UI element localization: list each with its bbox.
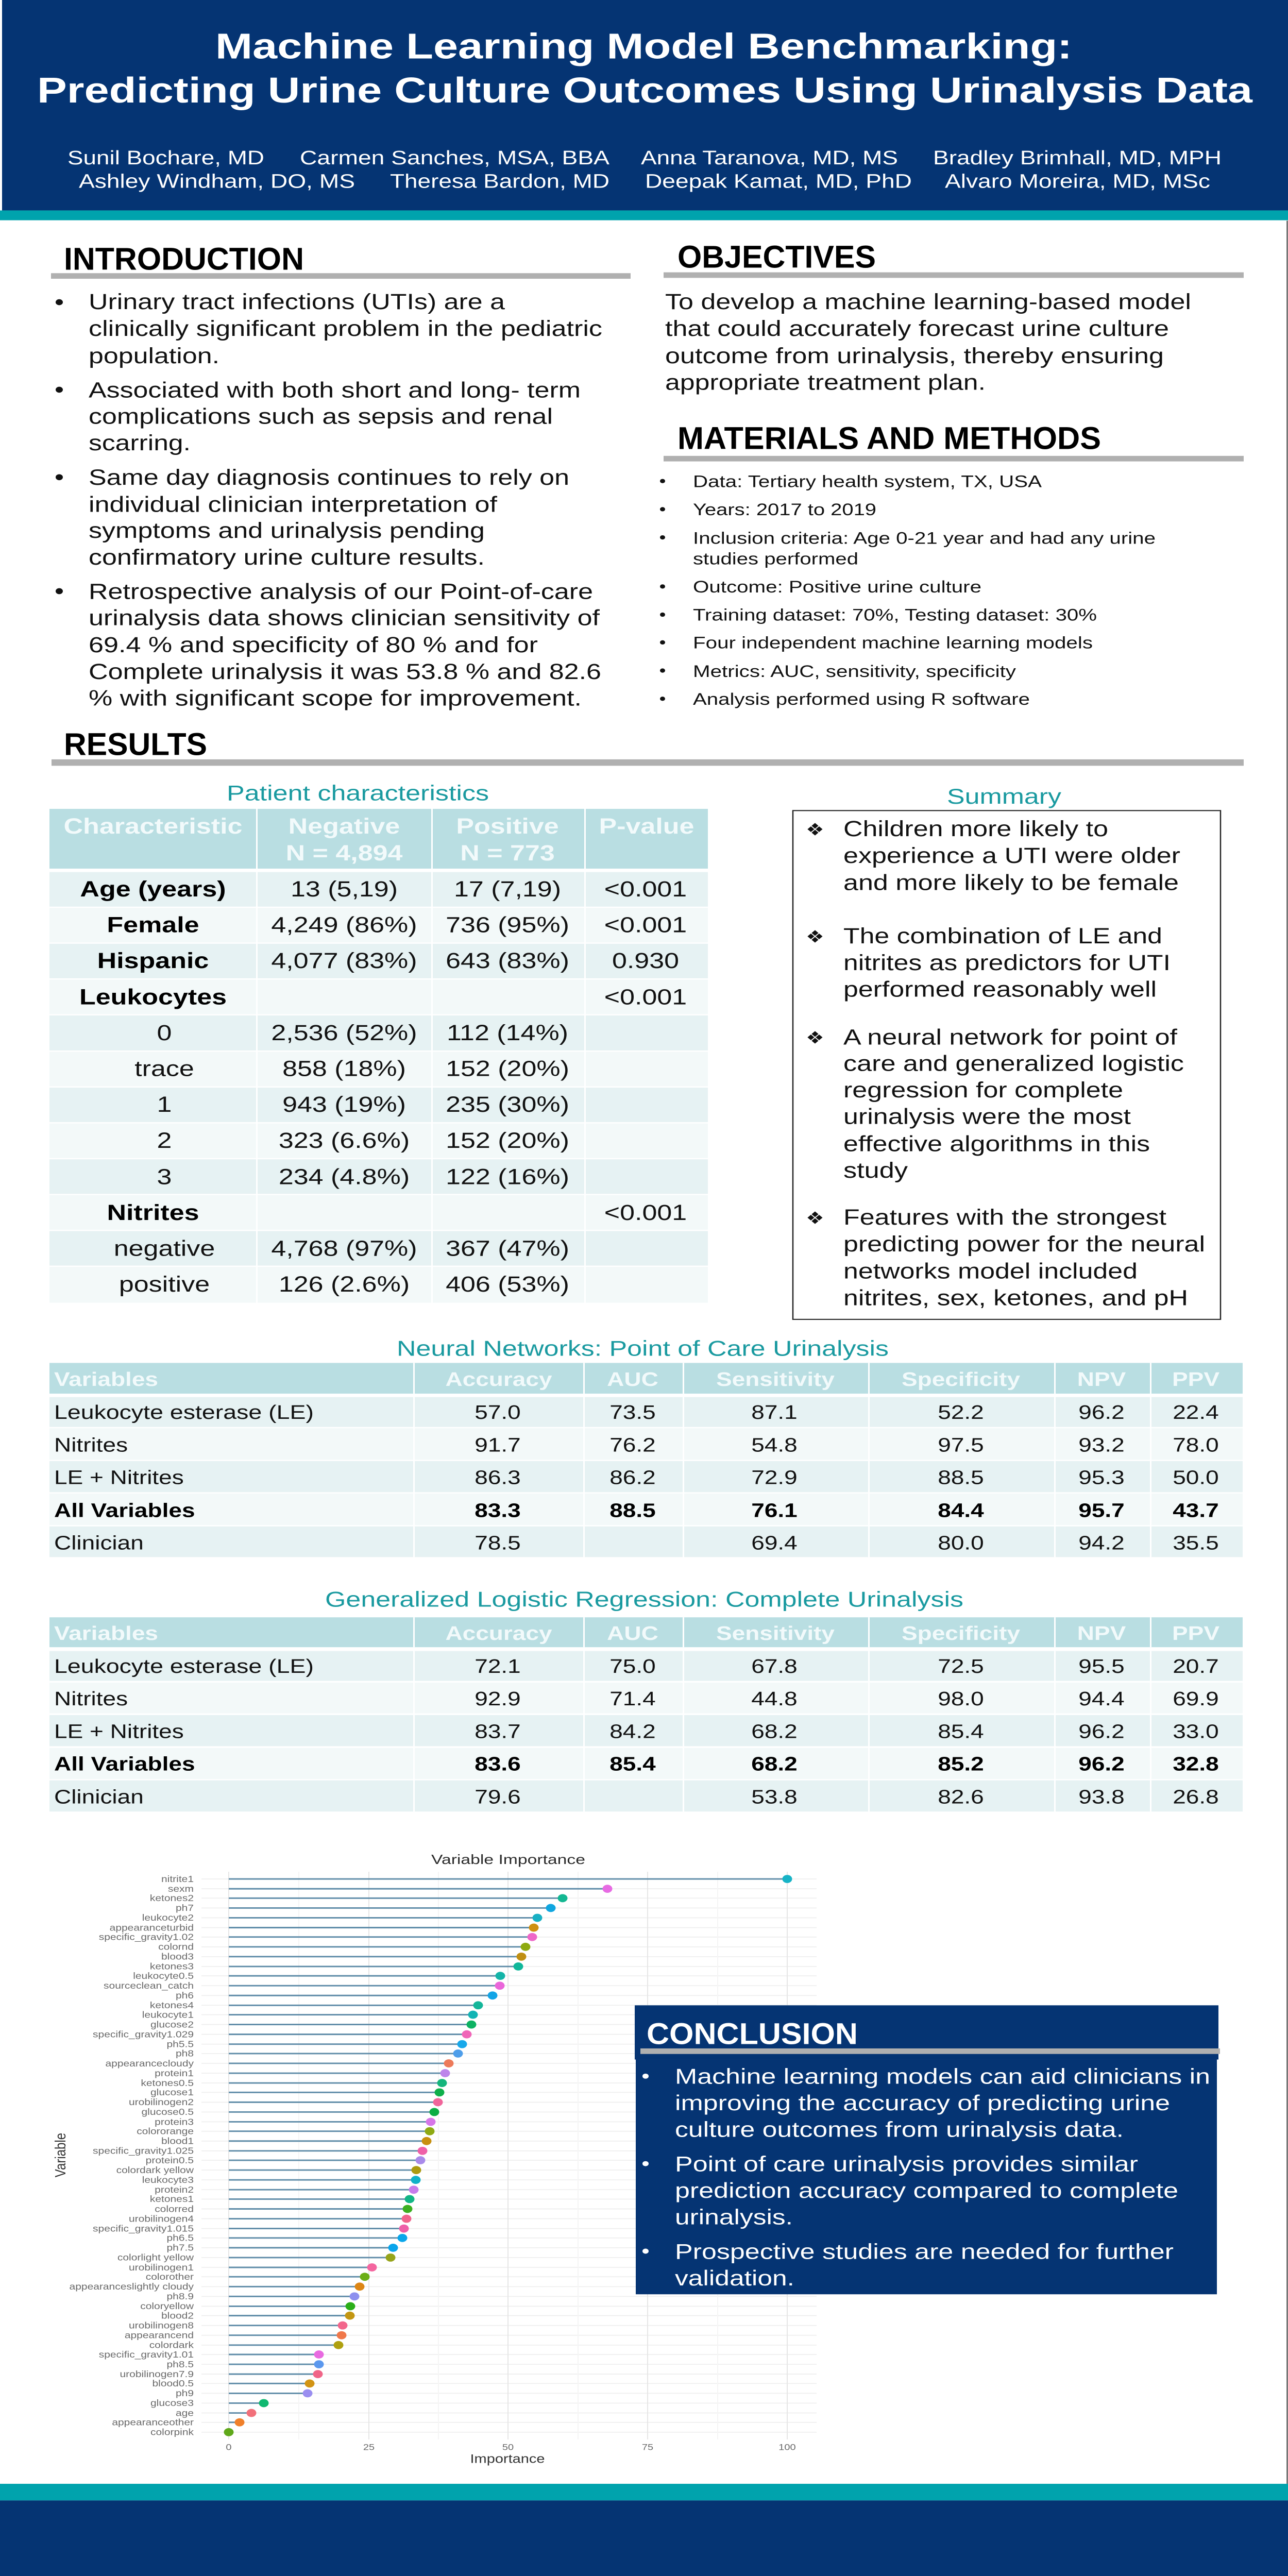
y axis variable labels: ketones2 xyxy=(150,1894,194,1904)
table body: 35.5 xyxy=(1173,1532,1219,1554)
table body: 93.2 xyxy=(1078,1434,1125,1456)
y axis variable labels: specific_gravity1.025 xyxy=(93,2146,194,2156)
table body: 86.3 xyxy=(474,1466,521,1488)
text block: introduction bullets: scarring. xyxy=(89,431,191,455)
table body: 234 (4.8%) xyxy=(279,1164,410,1189)
y axis variable labels: ph6.5 xyxy=(166,2233,194,2243)
y axis variable labels: specific_gravity1.01 xyxy=(99,2350,194,2360)
y axis variable labels: glucose0.5 xyxy=(142,2108,194,2117)
table body: 68.2 xyxy=(751,1753,798,1775)
y axis variable labels: colorred xyxy=(155,2205,194,2214)
table body: 73.5 xyxy=(609,1401,656,1423)
table body: 126 (2.6%) xyxy=(279,1272,410,1297)
text block: conclusion bullets: Machine learning models can aid clinicians in xyxy=(675,2064,1210,2089)
y axis variable labels: specific_gravity1.029 xyxy=(93,2030,194,2040)
table header row: Specificity xyxy=(902,1368,1021,1390)
text block: methods list: Outcome: Positive urine culture xyxy=(693,578,981,596)
text block: summary bullets: care and generalized logistic xyxy=(843,1052,1184,1076)
text block: introduction bullets: 69.4 % and specificity of 80 % and for xyxy=(89,633,538,657)
table body: 93.8 xyxy=(1078,1786,1125,1808)
table body: 736 (95%) xyxy=(446,913,569,937)
table body: 26.8 xyxy=(1173,1786,1219,1808)
table body: 80.0 xyxy=(938,1532,984,1554)
text block: methods list xyxy=(660,472,1156,708)
table body: 2 xyxy=(157,1128,172,1153)
table body: Leukocyte esterase (LE) xyxy=(54,1655,314,1677)
text block: methods list: studies performed xyxy=(693,549,858,568)
table body: 323 (6.6%) xyxy=(279,1128,410,1153)
text block: summary bullets: predicting power for the neural xyxy=(843,1232,1205,1256)
table body: 94.2 xyxy=(1078,1532,1125,1554)
y axis variable labels: appearancend xyxy=(125,2331,194,2341)
text block: introduction bullets: confirmatory urine culture results. xyxy=(89,545,485,569)
table body: 20.7 xyxy=(1173,1655,1219,1677)
table header row: P-value xyxy=(599,814,694,839)
text block: summary bullets: nitrites as predictors for UTI xyxy=(843,951,1171,975)
panel: materials and methods xyxy=(660,421,1244,708)
authors: Bradley Brimhall, MD, MPH xyxy=(933,147,1222,168)
panel: introduction xyxy=(51,242,631,710)
y axis variable labels: protein1 xyxy=(155,2069,194,2078)
text block: conclusion bullets: urinalysis. xyxy=(675,2205,793,2229)
table body: 32.8 xyxy=(1173,1753,1219,1775)
text block: objectives: that could accurately forecast urine culture xyxy=(665,316,1169,341)
text block: introduction bullets: clinically significant problem in the pediatric xyxy=(89,316,602,341)
authors: Sunil Bochare, MD xyxy=(67,147,264,168)
y axis variable labels: ketones4 xyxy=(150,2001,194,2011)
x axis tick labels: 25 xyxy=(363,2442,375,2452)
y axis variable labels: leukocyte1 xyxy=(142,2010,194,2020)
table body: 43.7 xyxy=(1173,1499,1219,1521)
y axis variable labels: protein3 xyxy=(155,2117,194,2127)
table body: 53.8 xyxy=(751,1786,798,1808)
table body: Nitrites xyxy=(54,1688,128,1709)
heading: conclusion xyxy=(640,2017,1220,2054)
table body: 85.4 xyxy=(609,1753,656,1775)
text block: introduction bullets: % with significant scope for improvement. xyxy=(89,686,582,710)
y axis variable labels: urobilinogen7.9 xyxy=(120,2369,194,2379)
table body: 33.0 xyxy=(1173,1720,1219,1742)
y axis variable labels: urobilinogen4 xyxy=(129,2214,194,2224)
chart: variable importance lollipop xyxy=(52,1853,817,2466)
y axis variable labels: ph9 xyxy=(176,2389,194,2399)
heading: summary: Summary xyxy=(947,784,1061,808)
table body: 4,768 (97%) xyxy=(271,1236,417,1261)
y axis variable labels: colordark xyxy=(149,2341,194,2350)
table body: 67.8 xyxy=(751,1655,798,1677)
y axis variable labels: nitrite1 xyxy=(161,1874,194,1884)
x axis tick labels: 75 xyxy=(642,2442,653,2452)
authors: Alvaro Moreira, MD, MSc xyxy=(945,170,1210,192)
heading: neural networks: Neural Networks: Point of Care Urinalysis xyxy=(397,1336,889,1360)
text block: summary bullets xyxy=(806,817,1205,1310)
table body: <0.001 xyxy=(604,913,687,937)
text block: introduction bullets: complications such as sepsis and renal xyxy=(89,404,553,429)
y axis variable labels: colororange xyxy=(137,2127,194,2137)
text block: objectives: appropriate treatment plan. xyxy=(665,370,986,394)
text block: summary bullets: ❖ xyxy=(806,1028,824,1048)
y axis variable labels: ph8.5 xyxy=(166,2360,194,2369)
table body: 78.5 xyxy=(474,1532,521,1554)
table body: trace xyxy=(134,1057,194,1081)
text block: methods list: Metrics: AUC, sensitivity, specificity xyxy=(693,662,1016,681)
table body: 79.6 xyxy=(474,1786,521,1808)
table body: 2,536 (52%) xyxy=(271,1021,417,1045)
table header row: AUC xyxy=(607,1622,658,1644)
text block: conclusion bullets xyxy=(642,2064,1210,2290)
text block: summary bullets: Features with the strongest xyxy=(843,1205,1166,1229)
table body: negative xyxy=(114,1236,215,1261)
y axis variable labels: urobilinogen2 xyxy=(129,2098,194,2108)
table body: Leukocytes xyxy=(79,985,227,1009)
text block: summary bullets: A neural network for point of xyxy=(843,1025,1178,1049)
table body: positive xyxy=(119,1272,210,1297)
table body: 76.1 xyxy=(751,1499,798,1521)
heading: objectives xyxy=(664,239,1244,278)
table header row: Variables xyxy=(54,1368,158,1390)
table body: 858 (18%) xyxy=(282,1057,406,1081)
table body: 82.6 xyxy=(938,1786,984,1808)
table body: 4,077 (83%) xyxy=(271,948,417,973)
heading: results: RESULTS xyxy=(64,727,207,762)
text block: summary bullets: The combination of LE and xyxy=(843,924,1162,948)
y axis variable labels: blood2 xyxy=(161,2311,194,2321)
text block: summary bullets: performed reasonably well xyxy=(843,977,1157,1002)
table header row: Positive xyxy=(456,814,559,839)
y axis variable labels: appearancecloudy xyxy=(106,2059,194,2069)
text block: introduction bullets: Urinary tract infections (UTIs) are a xyxy=(89,290,505,314)
y axis variable labels: glucose2 xyxy=(150,2020,194,2030)
title xyxy=(37,26,1253,110)
header banner xyxy=(0,0,1288,221)
table body: 152 (20%) xyxy=(446,1057,569,1081)
y axis variable labels: specific_gravity1.015 xyxy=(93,2224,194,2234)
text block: methods list: Analysis performed using R software xyxy=(693,690,1030,708)
text block: introduction bullets: Retrospective analysis of our Point-of-care xyxy=(89,579,593,603)
text block: conclusion bullets: improving the accuracy of predicting urine xyxy=(675,2091,1170,2115)
y axis variable labels: colornd xyxy=(158,1942,194,1952)
table body: 643 (83%) xyxy=(446,948,569,973)
table body xyxy=(49,1651,1243,1811)
heading: conclusion: CONCLUSION xyxy=(647,2017,858,2050)
table header row: Sensitivity xyxy=(716,1368,835,1390)
table header row: PPV xyxy=(1172,1368,1219,1390)
table body: 72.9 xyxy=(751,1466,798,1488)
authors: Ashley Windham, DO, MS xyxy=(79,170,355,192)
table header row: Accuracy xyxy=(445,1368,552,1390)
text block: introduction bullets xyxy=(56,290,602,710)
table body: <0.001 xyxy=(604,1200,687,1225)
table body: 54.8 xyxy=(751,1434,798,1456)
y axis variable labels xyxy=(70,1874,194,2437)
y axis variable labels: blood3 xyxy=(161,1952,194,1962)
table body: All Variables xyxy=(54,1499,195,1521)
text block: methods list: Data: Tertiary health system, TX, USA xyxy=(693,472,1042,491)
table body: 87.1 xyxy=(751,1401,798,1423)
y axis variable labels: sexm xyxy=(168,1884,194,1894)
table body: 85.4 xyxy=(938,1720,984,1742)
y axis variable labels: colorlight yellow xyxy=(117,2253,194,2263)
table body: 95.7 xyxy=(1078,1499,1125,1521)
table body: LE + Nitrites xyxy=(54,1720,184,1742)
text block: summary bullets: ❖ xyxy=(806,820,824,839)
table header row: Variables xyxy=(54,1622,158,1644)
text block: methods list: Inclusion criteria: Age 0-21 year and had any urine xyxy=(693,529,1156,548)
y axis variable labels: protein2 xyxy=(155,2185,194,2195)
x axis tick labels: 100 xyxy=(778,2442,796,2452)
text block: conclusion bullets: Point of care urinalysis provides similar xyxy=(675,2152,1138,2176)
table body: Leukocyte esterase (LE) xyxy=(54,1401,314,1423)
table body: 0 xyxy=(157,1021,172,1045)
table header row xyxy=(49,1363,1243,1394)
heading: introduction xyxy=(51,242,631,279)
chart title: Variable Importance xyxy=(431,1853,585,1867)
lollipop stems and dots xyxy=(224,1875,792,2436)
table body: 96.2 xyxy=(1078,1753,1125,1775)
y axis variable labels: coloryellow xyxy=(140,2302,194,2312)
text block: introduction bullets: urinalysis data shows clinician sensitivity of xyxy=(89,606,600,630)
authors: Anna Taranova, MD, MS xyxy=(641,147,898,168)
table body: 84.2 xyxy=(609,1720,656,1742)
y axis variable labels: ketones0.5 xyxy=(141,2078,194,2088)
table body: 4,249 (86%) xyxy=(271,913,417,937)
y axis variable labels: ketones3 xyxy=(150,1962,194,1972)
table body: 95.3 xyxy=(1078,1466,1125,1488)
table body: All Variables xyxy=(54,1753,195,1775)
y axis variable labels: leukocyte0.5 xyxy=(133,1971,194,1981)
table body: 122 (16%) xyxy=(446,1164,569,1189)
y axis variable labels: urobilinogen8 xyxy=(129,2321,194,2331)
table body: 96.2 xyxy=(1078,1401,1125,1423)
y axis variable labels: blood1 xyxy=(161,2137,194,2146)
text block: summary bullets: networks model included xyxy=(843,1259,1138,1283)
table body: <0.001 xyxy=(604,877,687,902)
table body: 83.3 xyxy=(474,1499,521,1521)
heading: introduction: INTRODUCTION xyxy=(64,242,304,277)
table header row: Negative xyxy=(289,814,400,839)
text block: introduction bullets: symptoms and urinalysis pending xyxy=(89,518,485,543)
heading: generalized logistic regression: Generalized Logistic Regression: Complete Urinalysis xyxy=(325,1587,963,1611)
y axis variable labels: colorother xyxy=(146,2273,194,2282)
y axis variable labels: leukocyte3 xyxy=(142,2176,194,2185)
heading: materials and methods: MATERIALS AND METHODS xyxy=(677,421,1101,456)
table body: 367 (47%) xyxy=(446,1236,569,1261)
table header row: NPV xyxy=(1077,1368,1126,1390)
y axis variable labels: glucose3 xyxy=(150,2399,194,2409)
text block: conclusion bullets: culture outcomes from urinalysis data. xyxy=(675,2117,1124,2141)
table body: Age (years) xyxy=(80,877,226,902)
table body: Nitrites xyxy=(54,1434,128,1456)
table body: 94.4 xyxy=(1078,1688,1125,1709)
authors: Theresa Bardon, MD xyxy=(390,170,609,192)
y axis variable labels: ph7.5 xyxy=(166,2243,194,2253)
table body: 17 (7,19) xyxy=(454,877,561,902)
table body: 83.7 xyxy=(474,1720,521,1742)
title: Predicting Urine Culture Outcomes Using Urinalysis Data xyxy=(37,71,1253,110)
summary box xyxy=(793,810,1221,1319)
text block: objectives xyxy=(665,290,1191,394)
y axis variable labels: ph8.9 xyxy=(166,2292,194,2302)
text block: summary bullets: urinalysis were the most xyxy=(843,1105,1131,1128)
table header row: PPV xyxy=(1172,1622,1219,1644)
table body: 97.5 xyxy=(938,1434,984,1456)
text block: summary bullets: regression for complete xyxy=(843,1078,1123,1102)
text block: objectives: outcome from urinalysis, thereby ensuring xyxy=(665,344,1164,368)
table body: 406 (53%) xyxy=(446,1272,569,1297)
text block: introduction bullets: Associated with both short and long- term xyxy=(89,378,581,402)
table body: 235 (30%) xyxy=(446,1092,569,1117)
table body: <0.001 xyxy=(604,985,687,1009)
authors xyxy=(67,147,1222,192)
panel: objectives xyxy=(664,239,1244,394)
text block: introduction bullets: individual clinician interpretation of xyxy=(89,492,498,516)
table body: 95.5 xyxy=(1078,1655,1125,1677)
table body: 943 (19%) xyxy=(282,1092,406,1117)
table body: 75.0 xyxy=(609,1655,656,1677)
table body: 84.4 xyxy=(938,1499,984,1521)
x axis tick labels: 50 xyxy=(502,2442,514,2452)
table body: 86.2 xyxy=(609,1466,656,1488)
table body: 13 (5,19) xyxy=(291,877,398,902)
table header row: N = 4,894 xyxy=(286,841,403,866)
table body: 96.2 xyxy=(1078,1720,1125,1742)
table header row: Characteristic xyxy=(64,814,243,839)
text block: summary bullets: ❖ xyxy=(806,1208,824,1228)
y axis variable labels: ketones1 xyxy=(150,2195,194,2205)
panel: generalized logistic regression table xyxy=(49,1587,1243,1811)
x axis tick labels xyxy=(226,2442,796,2452)
table body: 44.8 xyxy=(751,1688,798,1709)
table body: 88.5 xyxy=(609,1499,656,1521)
y axis variable labels: ph5.5 xyxy=(166,2040,194,2049)
y axis variable labels: urobilinogen1 xyxy=(129,2263,194,2273)
y axis variable labels: ph6 xyxy=(176,1991,194,2001)
heading: results xyxy=(52,727,1244,766)
panel: conclusion xyxy=(635,2005,1220,2294)
y axis variable labels: sourceclean_catch xyxy=(104,1981,194,1991)
table header row: NPV xyxy=(1077,1622,1126,1644)
table body: 1 xyxy=(157,1092,172,1117)
y axis variable labels: leukocyte2 xyxy=(142,1913,194,1923)
text block: summary bullets: ❖ xyxy=(806,927,824,946)
heading: patient characteristics: Patient characteristics xyxy=(227,781,489,805)
table body: 76.2 xyxy=(609,1434,656,1456)
text block: introduction bullets: Same day diagnosis continues to rely on xyxy=(89,465,569,489)
table header row: Accuracy xyxy=(445,1622,552,1644)
table body: 112 (14%) xyxy=(447,1021,568,1045)
text block: conclusion bullets: Prospective studies are needed for further xyxy=(675,2240,1174,2263)
axis title: importance: Importance xyxy=(470,2452,545,2466)
table body: 72.1 xyxy=(474,1655,521,1677)
text block: methods list: Years: 2017 to 2019 xyxy=(693,500,876,519)
table body: Female xyxy=(107,913,199,937)
text block: summary bullets: Children more likely to xyxy=(843,817,1108,841)
panel: summary xyxy=(793,784,1221,1319)
y axis variable labels: appearanceother xyxy=(112,2418,194,2428)
text block: summary bullets: nitrites, sex, ketones, and pH xyxy=(843,1286,1188,1310)
table body: 68.2 xyxy=(751,1720,798,1742)
text block: summary bullets: and more likely to be female xyxy=(843,871,1179,894)
table body: 22.4 xyxy=(1173,1401,1219,1423)
table body: 83.6 xyxy=(474,1753,521,1775)
table body: 85.2 xyxy=(938,1753,984,1775)
y axis variable labels: appearanceturbid xyxy=(110,1923,194,1933)
table body xyxy=(49,872,708,1303)
y axis variable labels: ph8 xyxy=(176,2049,194,2059)
y axis variable labels: appearanceslightly cloudy xyxy=(70,2282,194,2292)
table body: 3 xyxy=(157,1164,172,1189)
table body: 78.0 xyxy=(1173,1434,1219,1456)
table header row: Sensitivity xyxy=(716,1622,835,1644)
table body: 52.2 xyxy=(938,1401,984,1423)
table body: 69.9 xyxy=(1173,1688,1219,1709)
table body: 72.5 xyxy=(938,1655,984,1677)
authors: Carmen Sanches, MSA, BBA xyxy=(300,147,610,168)
table body: Nitrites xyxy=(107,1200,199,1225)
text block: objectives: To develop a machine learning-based model xyxy=(665,290,1191,314)
table body: 152 (20%) xyxy=(446,1128,569,1153)
table body: 57.0 xyxy=(474,1401,521,1423)
y axis variable labels: age xyxy=(176,2409,194,2418)
table body: 88.5 xyxy=(938,1466,984,1488)
y axis variable labels: specific_gravity1.02 xyxy=(99,1933,194,1942)
text block: conclusion bullets: validation. xyxy=(675,2266,794,2290)
heading: objectives: OBJECTIVES xyxy=(677,239,876,275)
table body: 71.4 xyxy=(609,1688,656,1709)
text block: introduction bullets: Complete urinalysis it was 53.8 % and 82.6 xyxy=(89,659,601,684)
table body: 69.4 xyxy=(751,1532,798,1554)
table header row: N = 773 xyxy=(460,841,555,866)
table body xyxy=(49,1397,1243,1557)
table header row: AUC xyxy=(607,1368,658,1390)
y axis variable labels: ph7 xyxy=(176,1904,194,1913)
title: Machine Learning Model Benchmarking: xyxy=(215,26,1072,66)
text block: introduction bullets: population. xyxy=(89,344,219,368)
table body: Hispanic xyxy=(97,948,209,973)
y axis variable labels: protein0.5 xyxy=(146,2156,194,2165)
table body: 92.9 xyxy=(474,1688,521,1709)
text block: methods list: Four independent machine learning models xyxy=(693,634,1093,652)
table header row: Specificity xyxy=(902,1622,1021,1644)
y axis variable labels: glucose1 xyxy=(150,2088,194,2098)
authors: Deepak Kamat, MD, PhD xyxy=(645,170,912,192)
x axis tick labels: 0 xyxy=(226,2442,232,2452)
axis title: variable: Variable xyxy=(52,2133,69,2177)
table header row xyxy=(49,809,708,869)
table body: Clinician xyxy=(54,1532,144,1554)
table body: 98.0 xyxy=(938,1688,984,1709)
table body: 91.7 xyxy=(474,1434,521,1456)
text block: summary bullets: study xyxy=(843,1158,908,1182)
table body: LE + Nitrites xyxy=(54,1466,184,1488)
footer band xyxy=(0,2484,1288,2576)
table body: 50.0 xyxy=(1173,1466,1219,1488)
text block: summary bullets: effective algorithms in this xyxy=(843,1132,1150,1156)
panel: patient characteristics table xyxy=(49,781,708,1303)
y axis variable labels: colorpink xyxy=(150,2428,194,2437)
panel: neural networks table xyxy=(49,1336,1243,1557)
text block: conclusion bullets: prediction accuracy compared to complete xyxy=(675,2178,1178,2202)
table body: Clinician xyxy=(54,1786,144,1808)
table body: 0.930 xyxy=(612,948,679,973)
y axis variable labels: blood0.5 xyxy=(152,2379,194,2389)
y axis variable labels: colordark yellow xyxy=(116,2165,194,2175)
table header row xyxy=(49,1617,1243,1647)
text block: methods list: Training dataset: 70%, Testing dataset: 30% xyxy=(693,606,1097,624)
text block: summary bullets: experience a UTI were older xyxy=(843,843,1180,868)
